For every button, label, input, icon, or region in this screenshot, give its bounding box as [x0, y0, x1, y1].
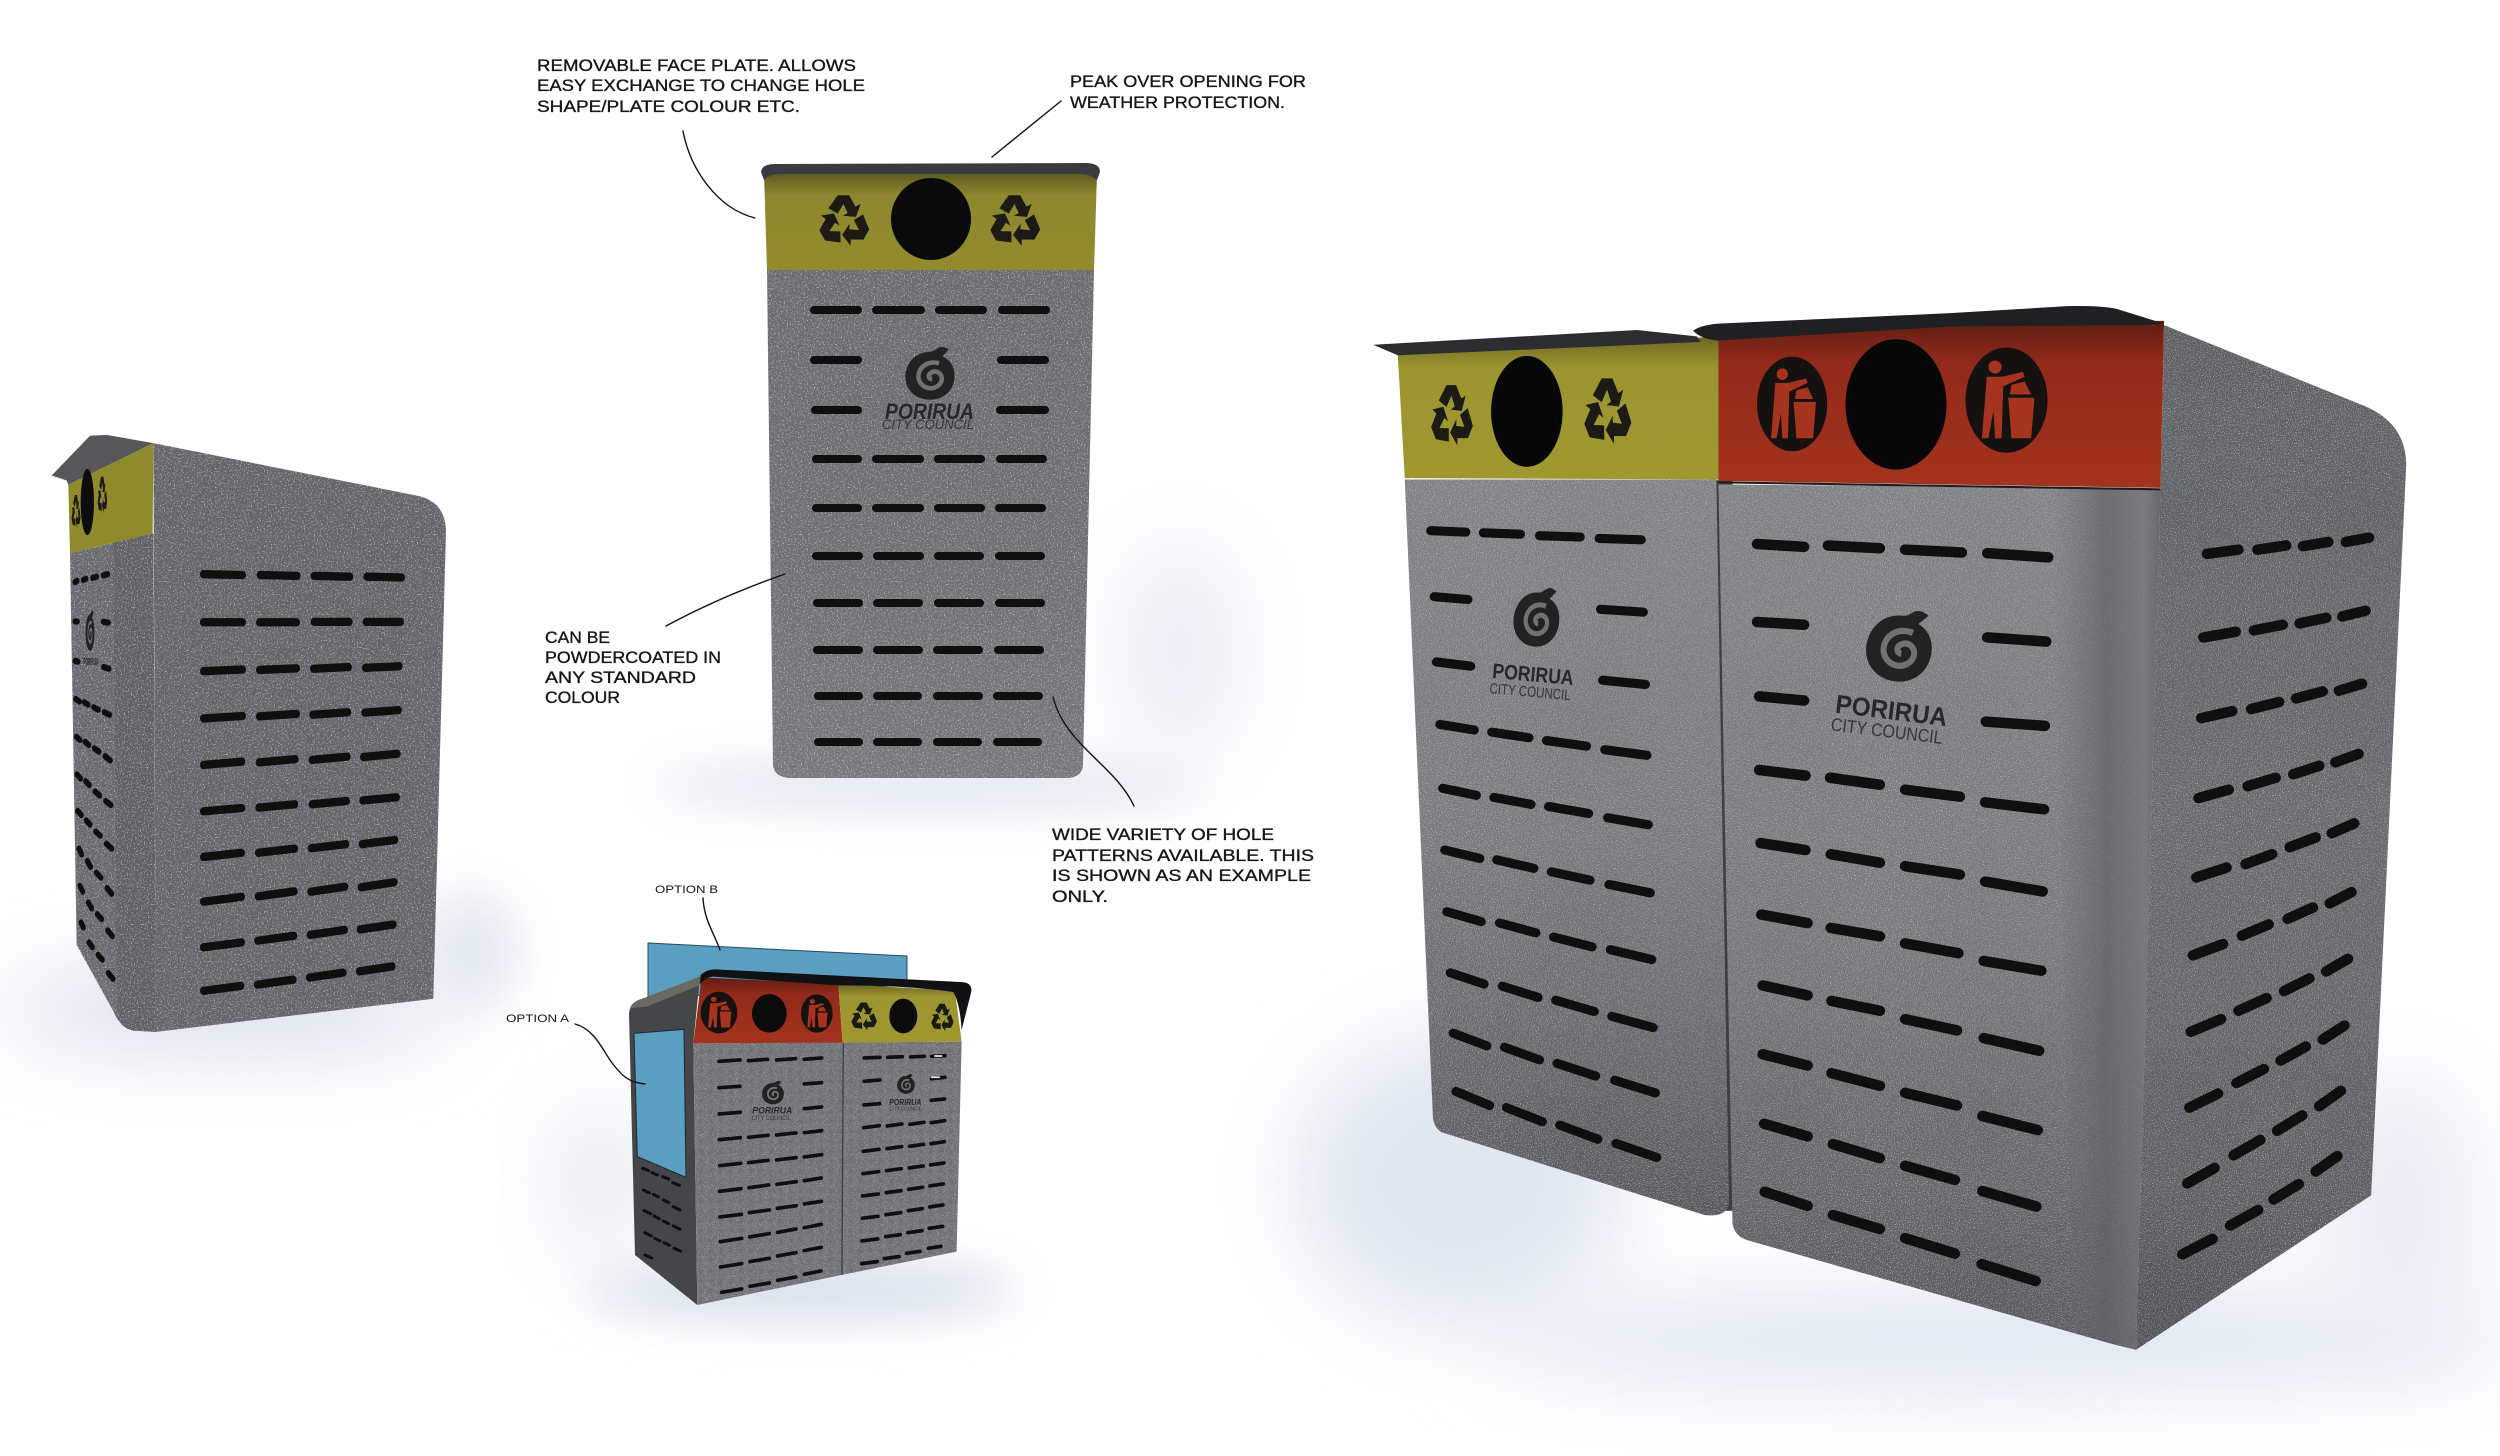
icon: recycling right: [985, 195, 1045, 250]
small bin logos: CITY COUNCIL: [752, 1115, 791, 1122]
centre bin peak: [761, 163, 1100, 180]
icon: litter right: [801, 994, 833, 1033]
small bin logos: CITY COUNCIL: [889, 1106, 921, 1112]
centre bin logo: CITY COUNCIL: [882, 416, 974, 432]
small bin openings: [752, 994, 917, 1033]
bin: rear three-quarter view, left: PORIRUA: [83, 656, 99, 667]
icon: large recycling right: [1579, 378, 1636, 449]
small bin peak: [700, 969, 971, 1030]
centre bin logo: PORIRUA: [885, 399, 974, 424]
callout: removable face plate: EASY EXCHANGE TO CHANGE HOLE: [537, 76, 865, 95]
bin pair: large view, right: [1373, 306, 2406, 1350]
callout: hole patterns: IS SHOWN AS AN EXAMPLE: [1052, 866, 1311, 885]
large recycling bin logo: [1489, 584, 1581, 704]
callout: powdercoating: COLOUR: [545, 688, 620, 707]
centre bin opening: [891, 178, 971, 260]
icon: recycling right small: [929, 1004, 956, 1033]
large recycling opening: [1491, 356, 1563, 467]
large litter bin front: [1718, 484, 2161, 1350]
bin: front view, centre: [761, 163, 1100, 778]
callout: peak over opening: WEATHER PROTECTION.: [1070, 93, 1285, 112]
large litter bin logo: PORIRUA: [1834, 689, 1949, 732]
small bin olive plate: [838, 984, 962, 1043]
large recycling bin logo: CITY COUNCIL: [1489, 681, 1571, 704]
centre bin face plate: [764, 174, 1097, 270]
centre bin body: [767, 270, 1094, 778]
icon: large litter right: [1965, 348, 2048, 453]
large litter bin logo: [1830, 602, 1960, 748]
large litter bin peak: [1693, 306, 2164, 341]
small bin side slots: [643, 1168, 681, 1258]
callout: powdercoating: [545, 574, 785, 707]
callout: peak over opening: [992, 72, 1306, 157]
left bin plate and peak: [52, 435, 153, 553]
large recycling bin peak: [1373, 330, 1701, 355]
large litter bin plate: [1718, 321, 2164, 488]
seam shadow between large bins: [1704, 479, 1737, 1211]
callout: powdercoating: ANY STANDARD: [545, 668, 696, 687]
large litter bin logo: CITY COUNCIL: [1830, 713, 1944, 748]
large recycling bin logo: PORIRUA: [1491, 660, 1575, 690]
callout: removable face plate: [537, 56, 865, 218]
large litter bin side: [2136, 325, 2406, 1350]
callout: option A: [506, 1013, 645, 1084]
option A side panel: [634, 1029, 686, 1177]
large recycling bin body: [1405, 479, 1729, 1215]
callout: hole patterns: WIDE VARIETY OF HOLE: [1052, 825, 1274, 844]
large litter bin front slots: [1757, 544, 2048, 1281]
icon: litter left: [701, 992, 737, 1033]
large recycling bin slots: [1431, 531, 1657, 1157]
callout: peak over opening: PEAK OVER OPENING FOR: [1070, 72, 1306, 91]
small bin logos: PORIRUA: [889, 1098, 921, 1107]
centre bin slots: [814, 310, 1046, 742]
callout: hole patterns: [1052, 697, 1314, 906]
callout: option A: OPTION A: [506, 1013, 570, 1025]
callout: removable face plate: SHAPE/PLATE COLOUR ETC.: [537, 97, 800, 116]
icon: large recycling left: [1426, 385, 1477, 450]
small bin front slots: [719, 1056, 945, 1292]
callout: removable face plate: REMOVABLE FACE PLATE. ALLOWS: [537, 56, 856, 75]
left bin front slots: [75, 574, 113, 979]
icon: recycling left: [814, 195, 874, 250]
small bin logos: [752, 1074, 921, 1122]
large recycling bin plate: [1398, 336, 1719, 479]
large litter opening: [1845, 339, 1947, 470]
bin pair with advertising panels, lower centre: [629, 943, 971, 1305]
left bin faces: [70, 443, 446, 1032]
left bin logo: [83, 611, 99, 667]
large litter bin side slots: [2182, 538, 2369, 1254]
callout: hole patterns: PATTERNS AVAILABLE. THIS: [1052, 846, 1314, 865]
callout: powdercoating: CAN BE: [545, 628, 610, 647]
small bin side: [629, 977, 700, 1305]
callout: hole patterns: ONLY.: [1052, 887, 1108, 906]
large litter bin corner fold: [2052, 488, 2161, 1350]
option B back panel: [648, 943, 907, 998]
small highlights: [932, 1056, 942, 1077]
small bin red plate: [693, 977, 843, 1043]
callout: option B: OPTION B: [655, 884, 718, 896]
icon: large litter left: [1757, 357, 1827, 451]
left bin side slots: [203, 574, 402, 991]
floor shadows: [0, 540, 2500, 1390]
small bin front: [693, 1042, 962, 1305]
small bin logos: PORIRUA: [752, 1105, 793, 1115]
bin: rear three-quarter view, left: [52, 435, 446, 1032]
centre bin logo: [882, 347, 974, 432]
icon: recycling left small: [848, 1002, 879, 1033]
callout: option B: [655, 884, 720, 950]
plate shadow line: [1718, 482, 2161, 489]
callout: powdercoating: POWDERCOATED IN: [545, 648, 721, 667]
